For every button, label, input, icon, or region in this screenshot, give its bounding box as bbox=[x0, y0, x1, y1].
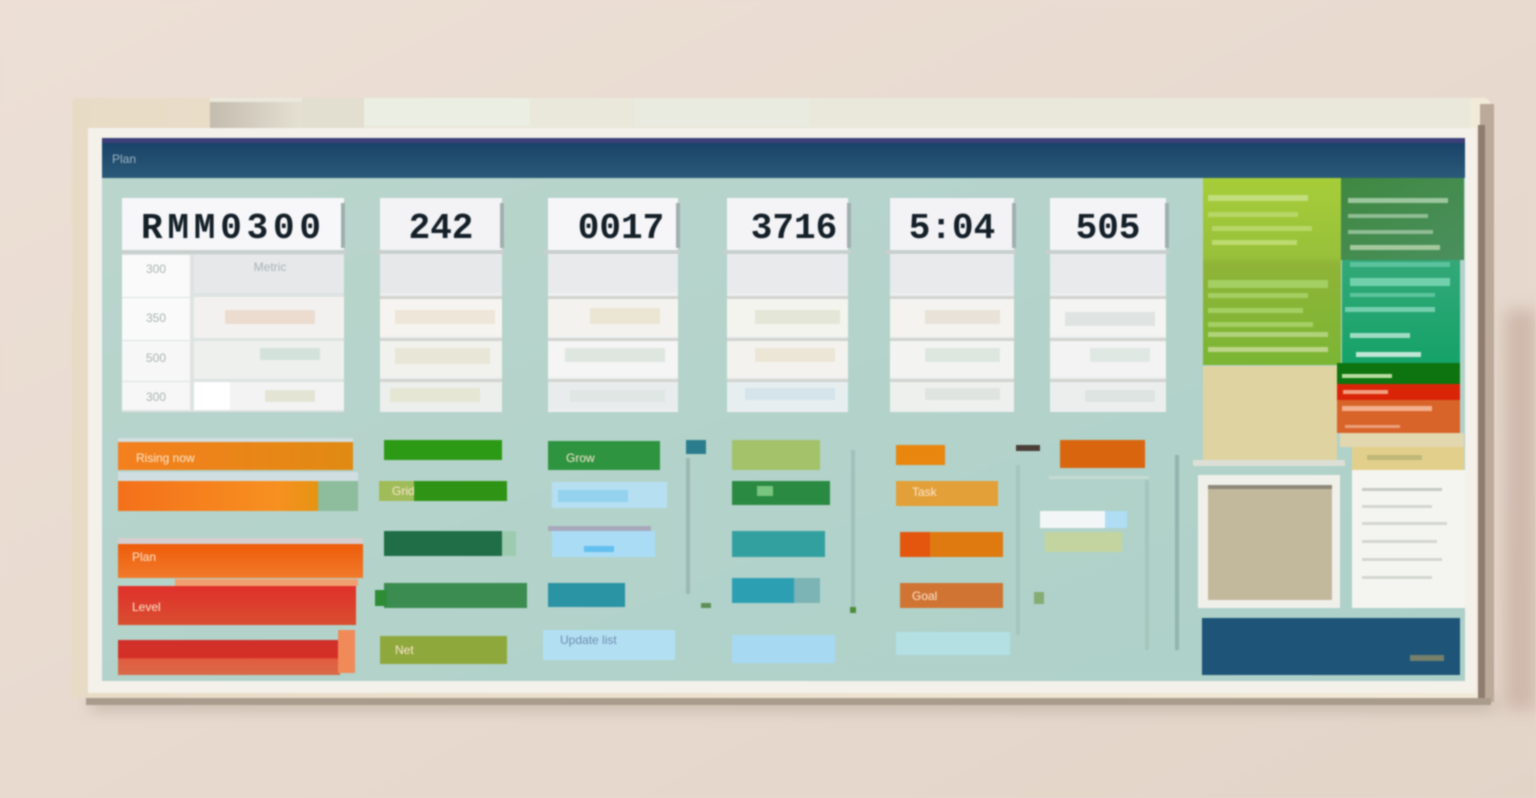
column 3 cards bbox=[544, 198, 680, 412]
side panel: orange strip bbox=[1337, 400, 1460, 433]
bars, column 5 bbox=[896, 445, 1010, 655]
beige sticky note bbox=[1203, 366, 1337, 460]
dotted connector bbox=[850, 450, 856, 613]
column 2 cards: 242 bbox=[409, 208, 473, 249]
vertical slider 1 bbox=[686, 440, 711, 608]
teal and blue bars, column 3: Update list bbox=[560, 633, 617, 647]
column 3 cards: 0017 bbox=[578, 208, 664, 249]
tan note tab bbox=[1340, 433, 1464, 471]
column 1 cards: 500 bbox=[146, 351, 166, 365]
column 6 cards: 505 bbox=[1076, 208, 1140, 249]
orange and red bars: Rising now bbox=[136, 451, 195, 465]
top tray bbox=[210, 98, 1470, 128]
column 4 cards bbox=[723, 198, 851, 412]
column 5 cards bbox=[886, 198, 1016, 412]
white document bbox=[1352, 470, 1465, 608]
board frame bbox=[72, 98, 1494, 705]
side panel: emerald bbox=[1342, 260, 1460, 365]
column 1 cards: Metric bbox=[254, 260, 286, 274]
soft wall shadow bbox=[90, 310, 1536, 710]
orange and red bars: Level bbox=[132, 600, 161, 614]
column 1 cards: 300 bbox=[146, 262, 166, 276]
orange and red bars bbox=[118, 438, 363, 675]
bars, column 6 bbox=[1040, 440, 1179, 650]
green bars: Grid bbox=[392, 484, 415, 498]
connector with marker bbox=[1016, 445, 1044, 635]
navy footer panel bbox=[1202, 618, 1460, 675]
column 4 cards: 3716 bbox=[751, 208, 837, 249]
orange and red bars: Plan bbox=[132, 550, 156, 564]
column 6 cards bbox=[1046, 198, 1169, 412]
teal and blue bars, column 3 bbox=[543, 441, 675, 660]
main teal panel bbox=[102, 143, 1465, 681]
column 2 cards bbox=[376, 198, 504, 412]
header bar: Plan bbox=[112, 152, 136, 166]
side panel: dark green bbox=[1341, 178, 1464, 260]
column 1 cards: RMM0300 bbox=[141, 208, 321, 249]
bars, column 4 bbox=[732, 440, 835, 663]
teal and blue bars, column 3: Grow bbox=[566, 451, 595, 465]
side panel: dark green strip bbox=[1337, 363, 1460, 385]
green bars: Net bbox=[395, 643, 414, 657]
side panel: lime bbox=[1203, 178, 1341, 365]
light strip under note bbox=[1193, 460, 1345, 466]
green bars bbox=[375, 440, 527, 664]
framed picture bbox=[1198, 475, 1340, 608]
bars, column 5: Task bbox=[912, 485, 938, 499]
side panel: red strip bbox=[1337, 384, 1460, 400]
column 5 cards: 5:04 bbox=[909, 208, 995, 249]
bars, column 5: Goal bbox=[912, 589, 937, 603]
header bar bbox=[102, 138, 1465, 178]
column 1 cards: 300 bbox=[146, 390, 166, 404]
column 1 cards bbox=[122, 198, 346, 412]
column 1 cards: 350 bbox=[146, 311, 166, 325]
